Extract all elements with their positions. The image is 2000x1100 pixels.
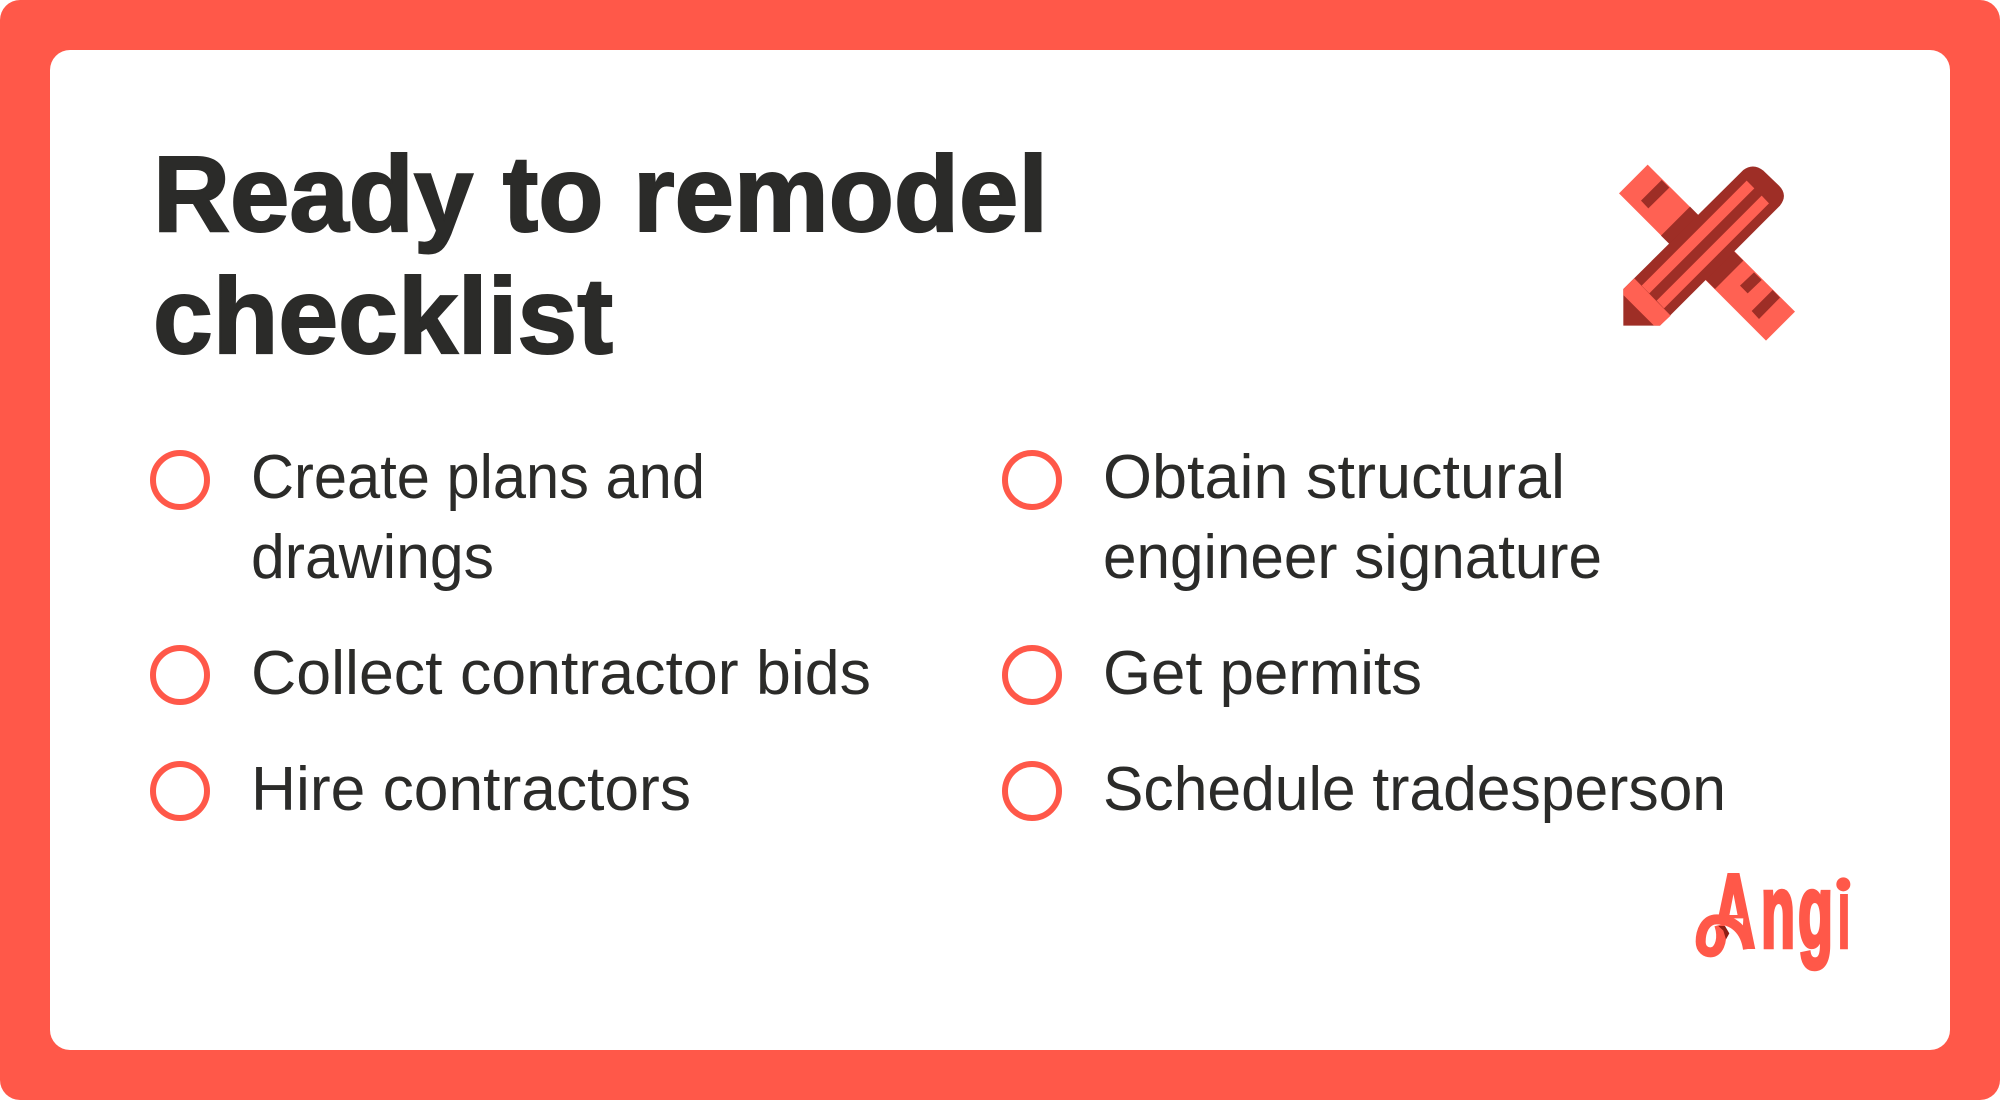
checkbox (1005, 764, 1059, 818)
logo: Angi: A (1712, 854, 1755, 970)
title: Ready to remodel (153, 133, 1048, 254)
item label: drawings (251, 523, 494, 592)
checkbox (153, 648, 207, 702)
item label: Obtain structural (1103, 443, 1565, 512)
checkbox (153, 764, 207, 818)
icon: crossed ruler and pencil (1619, 165, 1795, 341)
title (153, 133, 1048, 376)
item: get permits (1005, 639, 1422, 708)
checkbox (1005, 453, 1059, 507)
item: obtain structural engineer signature (1005, 443, 1602, 592)
item label: engineer signature (1103, 523, 1602, 592)
item label: Hire contractors (251, 755, 691, 824)
checklist: left column (153, 443, 871, 824)
item label: Create plans and (251, 443, 705, 512)
item: create plans and drawings (153, 443, 705, 592)
item: collect contractor bids (153, 639, 871, 708)
logo: Angi: n (1761, 854, 1795, 970)
item label: Collect contractor bids (251, 639, 871, 708)
checkbox (1005, 648, 1059, 702)
logo: Angi: g (1798, 854, 1833, 970)
title: checklist (153, 255, 613, 376)
item: schedule tradesperson (1005, 755, 1726, 824)
logo: Angi (1701, 854, 1853, 970)
item: hire contractors (153, 755, 691, 824)
logo: Angi: i (1838, 854, 1850, 970)
checklist: right column (1005, 443, 1726, 824)
item label: Get permits (1103, 639, 1422, 708)
item label: Schedule tradesperson (1103, 755, 1726, 824)
checkbox (153, 453, 207, 507)
